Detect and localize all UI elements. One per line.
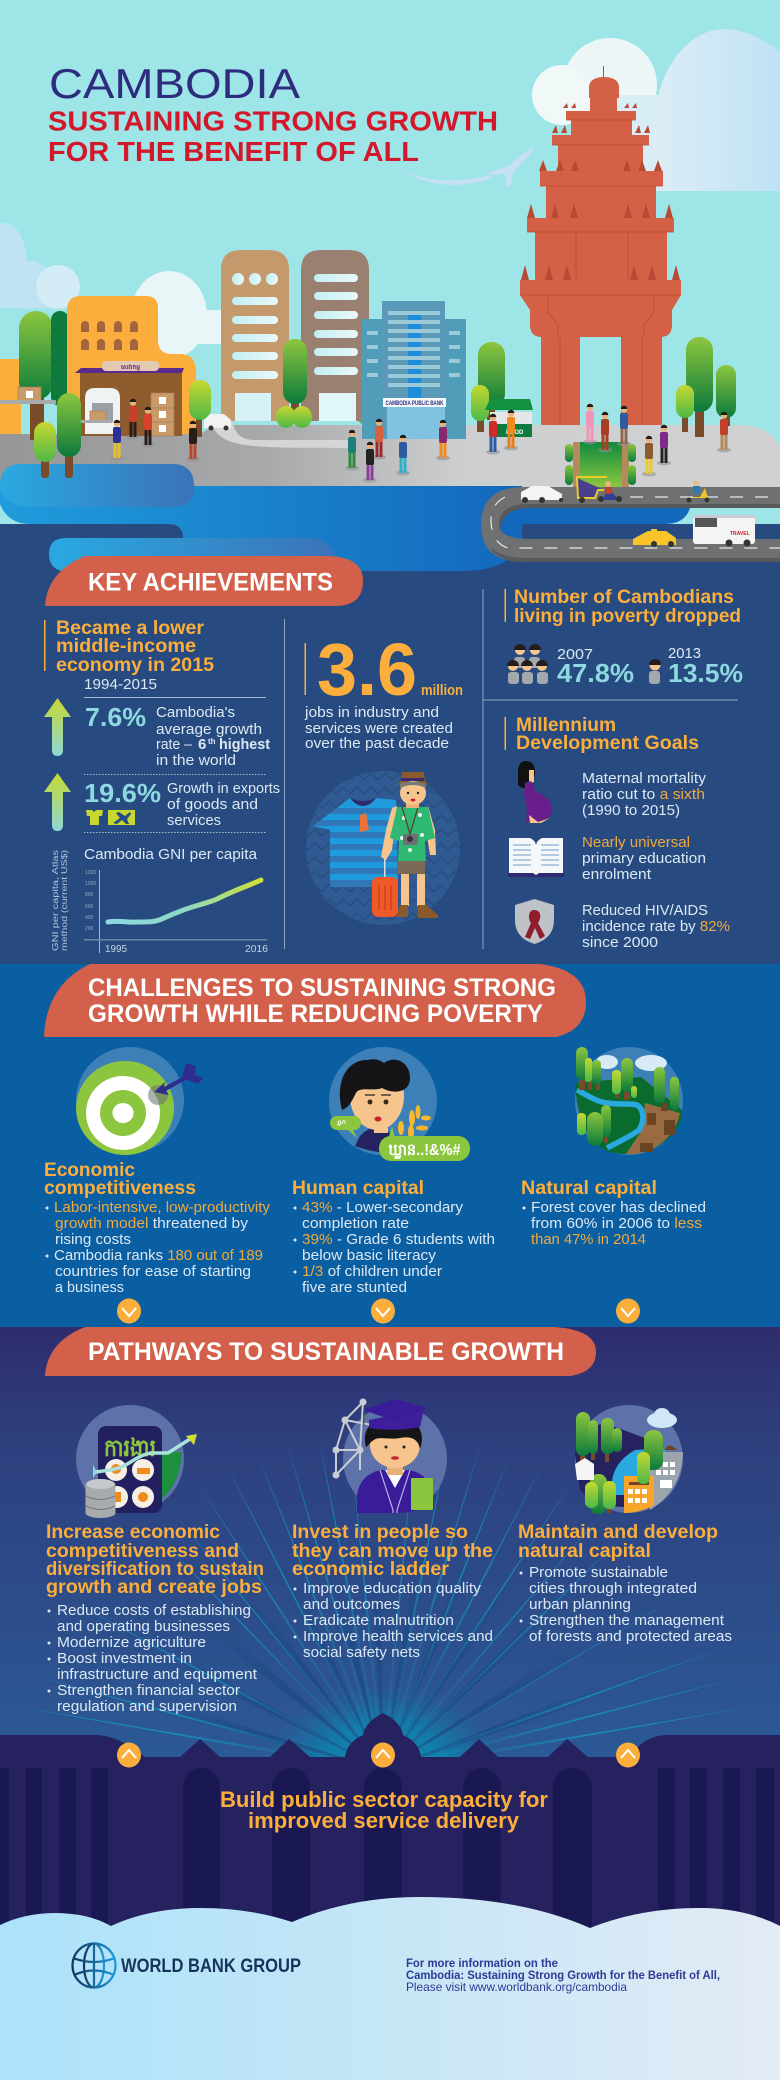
title: Cambodia: CAMBODIA: [49, 60, 300, 107]
stat: 3.6 million: million: [421, 682, 463, 699]
heading: increase competitiveness: growth and create jobs: [46, 1576, 262, 1598]
heading: increase competitiveness: [46, 1521, 264, 1598]
road: [481, 487, 780, 562]
bullets: invest in people: Eradicate malnutrition: [303, 1612, 454, 1629]
bullets: invest in people: Improve education quality: [303, 1580, 482, 1597]
World Bank Group logo: [72, 1943, 301, 1988]
taxi: [633, 529, 676, 547]
bullets: maintain natural capital: urban planning: [529, 1596, 631, 1613]
HIV text: [582, 902, 730, 951]
bullets: increase competitiveness: Strengthen financial sector: [57, 1682, 240, 1699]
icon: child with grain and speech bubbles: ឃ្លាន..!&%#: [388, 1142, 461, 1160]
bullets: invest in people: social safety nets: [303, 1644, 420, 1661]
orange market building: សេវាកម្ម: [121, 364, 140, 371]
bullets: maintain natural capital: [520, 1564, 732, 1645]
people on the plaza: [110, 399, 731, 482]
icon: five people: [507, 644, 548, 684]
challenges heading: CHALLENGES TO SUSTAINING STRONG: [88, 974, 556, 1002]
pathways heading: [45, 1327, 596, 1376]
icon: target and dart: [76, 1047, 203, 1155]
bullets: invest in people: Improve health services and: [303, 1628, 493, 1645]
line chart: GNI per capita: 600: [85, 904, 94, 910]
bullets: increase competitiveness: Boost investment in: [57, 1650, 192, 1667]
icon: forest and river: [575, 1047, 683, 1155]
icon: goods and services: [86, 810, 135, 825]
panel: natural capital: [521, 1047, 706, 1248]
panel: lower middle-income economy: 1994-2015: [84, 676, 157, 693]
tan tower building: [221, 250, 289, 421]
bullets: increase competitiveness: [48, 1602, 258, 1715]
heading: economic competitiveness: Economic: [44, 1159, 135, 1181]
public sector capacity callout: [220, 1787, 548, 1833]
bullets: natural capital: Forest cover has declined: [531, 1199, 706, 1216]
bullets: maintain natural capital: Strengthen the management: [529, 1612, 725, 1629]
bullets: economic competitiveness: a business: [55, 1279, 124, 1296]
icon: HIV ribbon shield: [515, 899, 554, 944]
HIV text: incidence rate by 82%: [582, 918, 730, 935]
orange market building: [0, 296, 196, 436]
growth description: highest: [219, 736, 270, 753]
heading: economic competitiveness: competitiveness: [44, 1177, 196, 1199]
heading: maintain natural capital: Maintain and develop: [518, 1521, 718, 1543]
panel: maintain natural capital: [518, 1405, 732, 1645]
challenges heading: GROWTH WHILE REDUCING POVERTY: [88, 1000, 543, 1028]
bullets: invest in people: [294, 1580, 493, 1661]
airplane: [403, 147, 533, 187]
heading: invest in people: Invest in people so: [292, 1521, 468, 1543]
hedges: [565, 444, 636, 485]
exports description: services: [167, 812, 221, 829]
bullets: invest in people: and outcomes: [303, 1596, 400, 1613]
heading: lower middle-income: economy in 2015: [56, 654, 214, 676]
bullets: human capital: 43% - Lower-secondary: [302, 1199, 464, 1216]
key achievements heading: KEY ACHIEVEMENTS: [88, 568, 333, 596]
education text: [582, 834, 706, 883]
bullets: economic competitiveness: [46, 1199, 271, 1296]
icon: jobs board, coins and growth arrow: [76, 1405, 197, 1518]
bullets: economic competitiveness: Cambodia ranks 180 out of 189: [54, 1247, 263, 1264]
bullets: maintain natural capital: cities through integrated: [529, 1580, 697, 1597]
public sector capacity callout: improved service delivery: [248, 1808, 519, 1833]
heading: MDG: [516, 714, 699, 754]
growth description: rate –: [156, 736, 193, 753]
icon: pregnant woman: [518, 761, 552, 823]
food stall: [485, 399, 533, 437]
growth description: in the world: [156, 752, 236, 769]
growth description: [156, 704, 270, 769]
icon: child with grain and speech bubbles: [329, 1047, 470, 1161]
scooter: [686, 480, 710, 502]
clouds behind the tower: [532, 29, 780, 191]
heading: maintain natural capital: [518, 1521, 718, 1562]
bullets: increase competitiveness: Modernize agriculture: [57, 1634, 206, 1651]
strip building left: [0, 359, 21, 434]
maternal mortality text: (1990 to 2015): [582, 802, 680, 819]
bus: [693, 515, 755, 546]
line chart: GNI per capita: 1000: [85, 881, 96, 887]
line chart: GNI per capita: 800: [85, 892, 94, 898]
education text: enrolment: [582, 866, 652, 883]
heading: maintain natural capital: natural capital: [518, 1540, 651, 1562]
back trees: [19, 311, 69, 440]
heading: MDG: Millennium: [516, 714, 616, 736]
panel: pathways background with rays: [0, 1327, 780, 1855]
jobs description: over the past decade: [305, 735, 449, 752]
bullets: increase competitiveness: and operating businesses: [57, 1618, 230, 1635]
bullets: economic competitiveness: growth model threatened by: [55, 1215, 249, 1232]
heading: increase competitiveness: diversification to sustain: [46, 1558, 264, 1580]
center tree in front of buildings: [276, 339, 312, 428]
bullets: economic competitiveness: rising costs: [55, 1231, 131, 1248]
Cambodia Public Bank building: CAMBODIA PUBLIC BANK: [386, 401, 444, 407]
growth description: average growth: [156, 721, 262, 738]
jobs description: services were created: [305, 720, 453, 737]
brown tower building: [301, 250, 369, 421]
trees: [189, 337, 736, 438]
line chart: GNI per capita: method (current US$): [59, 850, 69, 951]
illustration: garment shirt and tourist: [306, 771, 460, 925]
icon: export arrow: [44, 773, 71, 831]
pathways heading: PATHWAYS TO SUSTAINABLE GROWTH: [88, 1338, 564, 1366]
line chart: GNI per capita: 200: [85, 926, 94, 932]
river bands: [0, 464, 338, 572]
bullets: maintain natural capital: of forests and protected areas: [529, 1628, 732, 1645]
stat: export growth: 19.6%: [84, 778, 161, 808]
heading: poverty: Number of Cambodians: [514, 586, 734, 608]
icon: graduate with network: [332, 1398, 447, 1513]
bullets: human capital: completion rate: [302, 1215, 409, 1232]
icon: open book: [508, 838, 564, 877]
subtitle: SUSTAINING STRONG GROWTH: [48, 106, 498, 136]
heading: lower middle-income: Became a lower: [56, 617, 204, 639]
icons: up chevrons: [117, 1742, 640, 1768]
heading: poverty: [514, 586, 741, 627]
panel: economic competitiveness: [44, 1047, 271, 1296]
growth description: 6: [198, 736, 206, 753]
growth description: Cambodia's: [156, 704, 235, 721]
panel: millennium development goals: [504, 714, 730, 951]
bullets: natural capital: [522, 1199, 706, 1248]
heading: MDG: Development Goals: [516, 732, 699, 754]
more information note: Please visit www.worldbank.org/cambodia: [406, 1980, 627, 1994]
ground and plaza: [0, 421, 780, 487]
heading: economic competitiveness: [44, 1159, 196, 1199]
heading: poverty: living in poverty dropped: [514, 605, 741, 627]
food stall: FOOD: [506, 430, 524, 436]
challenges heading: [44, 964, 586, 1037]
education text: primary education: [582, 850, 706, 867]
more information note: [406, 1956, 720, 1994]
bullets: increase competitiveness: infrastructure and equipment: [57, 1666, 258, 1683]
heading: invest in people: [292, 1521, 493, 1580]
heading: increase competitiveness: Increase economic: [46, 1521, 220, 1543]
education text: Nearly universal: [582, 834, 690, 851]
Cambodia Public Bank building: [362, 301, 466, 439]
maternal mortality text: [582, 770, 707, 819]
icon: growth arrow: [44, 698, 71, 756]
maternal mortality text: ratio cut to a sixth: [582, 786, 705, 803]
panel: invest in people: [292, 1398, 493, 1661]
exports description: of goods and: [167, 796, 258, 813]
line chart: GNI per capita: GNI per capita, Atlas: [50, 850, 60, 951]
bullets: economic competitiveness: countries for ease of starting: [55, 1263, 251, 1280]
growth description: th: [208, 737, 216, 746]
line chart: GNI per capita: 1200: [85, 870, 96, 876]
chart title: Cambodia GNI per capita: [84, 846, 258, 863]
subtitle: FOR THE BENEFIT OF ALL: [48, 136, 419, 167]
exports description: [167, 780, 280, 829]
stat: average growth: 7.6%: [85, 702, 146, 732]
bullets: human capital: 39% - Grade 6 students with: [302, 1231, 495, 1248]
public sector capacity callout: Build public sector capacity for: [220, 1787, 548, 1812]
icon: child with grain and speech bubbles: #^: [337, 1119, 346, 1128]
white car: [521, 486, 563, 503]
World Bank Group logo: WORLD BANK GROUP: [121, 1956, 301, 1977]
bus: TRAVEL: [730, 531, 750, 537]
bullets: increase competitiveness: regulation and supervision: [57, 1698, 237, 1715]
bullets: economic competitiveness: Labor-intensive, low-productivity: [54, 1199, 271, 1216]
tuk-tuk and motorbike: [576, 476, 622, 503]
icon: one person: [649, 659, 661, 684]
sky background: [0, 0, 780, 530]
icons: down chevrons: [117, 1298, 640, 1324]
stat: 2013: 13.5%: [668, 658, 743, 688]
stat: 2007: [557, 646, 634, 688]
key achievements heading: [45, 556, 363, 606]
more information note: For more information on the: [406, 1956, 558, 1970]
stat: 2007: 2007: [557, 646, 593, 663]
heading: lower middle-income: [56, 617, 214, 676]
front trees: [34, 393, 81, 478]
jobs description: jobs in industry and: [304, 704, 439, 721]
subtitle: [48, 106, 498, 167]
bullets: human capital: 1/3 of children under: [302, 1263, 442, 1280]
left clouds: [0, 223, 222, 359]
title: [48, 60, 498, 167]
bullets: increase competitiveness: Reduce costs of establishing: [57, 1602, 251, 1619]
parked white car: [204, 414, 231, 430]
river: [0, 486, 522, 571]
jobs description: [304, 704, 453, 752]
bullets: natural capital: than 47% in 2014: [531, 1231, 646, 1248]
independence monument: [520, 66, 681, 442]
panel: increase competitiveness: [46, 1405, 264, 1715]
panel: jobs created: [304, 628, 463, 925]
icon: jobs board, coins and growth arrow: ការងារ: [104, 1435, 156, 1462]
panel: lower middle-income economy: [44, 617, 280, 955]
vehicles: [521, 476, 755, 547]
heading: human capital: Human capital: [292, 1177, 424, 1199]
panel: poverty dropped: [504, 586, 743, 688]
heading: increase competitiveness: competitiveness and: [46, 1540, 239, 1562]
panel: challenges background: [0, 964, 780, 1327]
more information note: Cambodia: Sustaining Strong Growth for the Benefit of All,: [406, 1968, 720, 1982]
line chart: GNI per capita: [50, 850, 268, 955]
public sector building silhouette: [0, 1713, 780, 1960]
stat: 3.6 million: 3.6: [317, 628, 417, 711]
navy section background: [0, 524, 780, 964]
exports description: Growth in exports: [167, 780, 280, 797]
line chart: GNI per capita: 2016: [245, 943, 268, 955]
icon: green city: [575, 1405, 683, 1514]
HIV text: Reduced HIV/AIDS: [582, 902, 708, 919]
heading: invest in people: they can move up the: [292, 1540, 493, 1562]
HIV text: since 2000: [582, 934, 658, 951]
stat: 2007: 47.8%: [557, 658, 634, 688]
bullets: natural capital: from 60% in 2006 to less: [531, 1215, 702, 1232]
bullets: maintain natural capital: Promote sustainable: [529, 1564, 668, 1581]
bullets: human capital: below basic literacy: [302, 1247, 437, 1264]
maternal mortality text: Maternal mortality: [582, 770, 707, 787]
heading: invest in people: economic ladder: [292, 1558, 449, 1580]
stat: 2013: 2013: [668, 645, 701, 662]
line chart: GNI per capita: 1995: [105, 943, 127, 955]
icon: globe: [72, 1943, 116, 1988]
heading: lower middle-income: middle-income: [56, 635, 196, 657]
panel: human capital: [292, 1047, 495, 1296]
bullets: human capital: [294, 1199, 495, 1296]
line chart: GNI per capita: 400: [85, 915, 94, 921]
stat: 2013: [668, 645, 743, 688]
footer cloud: [0, 1897, 780, 2080]
heading: natural capital: Natural capital: [521, 1177, 657, 1199]
bullets: human capital: five are stunted: [302, 1279, 407, 1296]
